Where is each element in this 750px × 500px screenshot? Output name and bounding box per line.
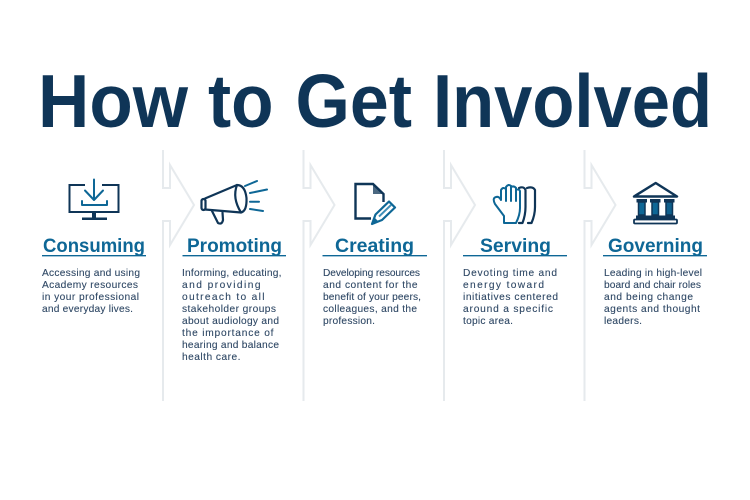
text: creating description: colleagues, and the (323, 304, 417, 315)
text: governing description: board and chair roles (604, 280, 701, 291)
text: consuming description (42, 268, 140, 315)
arrow: promoting to creating (304, 150, 334, 401)
text: promoting description: outreach to all (182, 292, 264, 303)
panel: governing (603, 183, 707, 327)
title: to (208, 59, 274, 143)
text: serving description: energy toward (463, 280, 544, 291)
panel: creating (322, 184, 427, 327)
text: promoting description: stakeholder groups (182, 304, 276, 315)
panel: serving (463, 185, 567, 327)
text: promoting description: about audiology and (182, 316, 279, 327)
text: serving description: topic area. (463, 316, 513, 327)
text: creating description: Developing resources (323, 268, 420, 279)
title (38, 59, 712, 143)
icon: monitor with download (70, 180, 118, 220)
text: serving description: initiatives centered (463, 292, 558, 303)
arrow: consuming to promoting (163, 150, 194, 401)
text: promoting description: hearing and balance (182, 340, 279, 351)
text: promoting description: Informing, educating, (182, 268, 282, 279)
icon: columned building (634, 183, 677, 224)
text: serving description: around a specific (463, 304, 553, 315)
panel: consuming (42, 180, 146, 315)
text: promoting description: and providing (182, 280, 261, 291)
title: How (38, 59, 189, 143)
icon: raised hands (494, 185, 535, 223)
text: serving description: Devoting time and (463, 268, 557, 279)
panel: promoting (182, 181, 286, 363)
text: promoting description: the importance of (182, 328, 274, 339)
heading: consuming: Consuming (43, 236, 145, 257)
heading: serving: Serving (480, 236, 551, 257)
text: promoting description (182, 268, 282, 363)
text: consuming description: in your professional (42, 292, 139, 303)
text: governing description (604, 268, 702, 327)
text: consuming description: Academy resources (42, 280, 138, 291)
heading: creating: Creating (335, 236, 414, 257)
icon: document and pencil (356, 184, 395, 224)
text: governing description: Leading in high-level (604, 268, 702, 279)
text: creating description: and content for the (323, 280, 418, 291)
text: promoting description: health care. (182, 352, 240, 363)
text: creating description (323, 268, 421, 327)
text: consuming description: and everyday lives. (42, 304, 133, 315)
text: consuming description: Accessing and using (42, 268, 140, 279)
text: governing description: leaders. (604, 316, 642, 327)
text: governing description: and being change (604, 292, 693, 303)
heading: governing: Governing (608, 236, 703, 257)
text: creating description: benefit of your peers, (323, 292, 421, 303)
text: serving description (463, 268, 558, 327)
text: governing description: agents and thought (604, 304, 700, 315)
icon: megaphone (202, 181, 267, 224)
text: creating description: profession. (323, 316, 375, 327)
arrow: serving to governing (584, 150, 616, 401)
title: Involved (433, 59, 712, 143)
title: Get (296, 59, 412, 143)
heading: promoting: Promoting (187, 236, 282, 257)
arrow: creating to serving (444, 150, 475, 401)
